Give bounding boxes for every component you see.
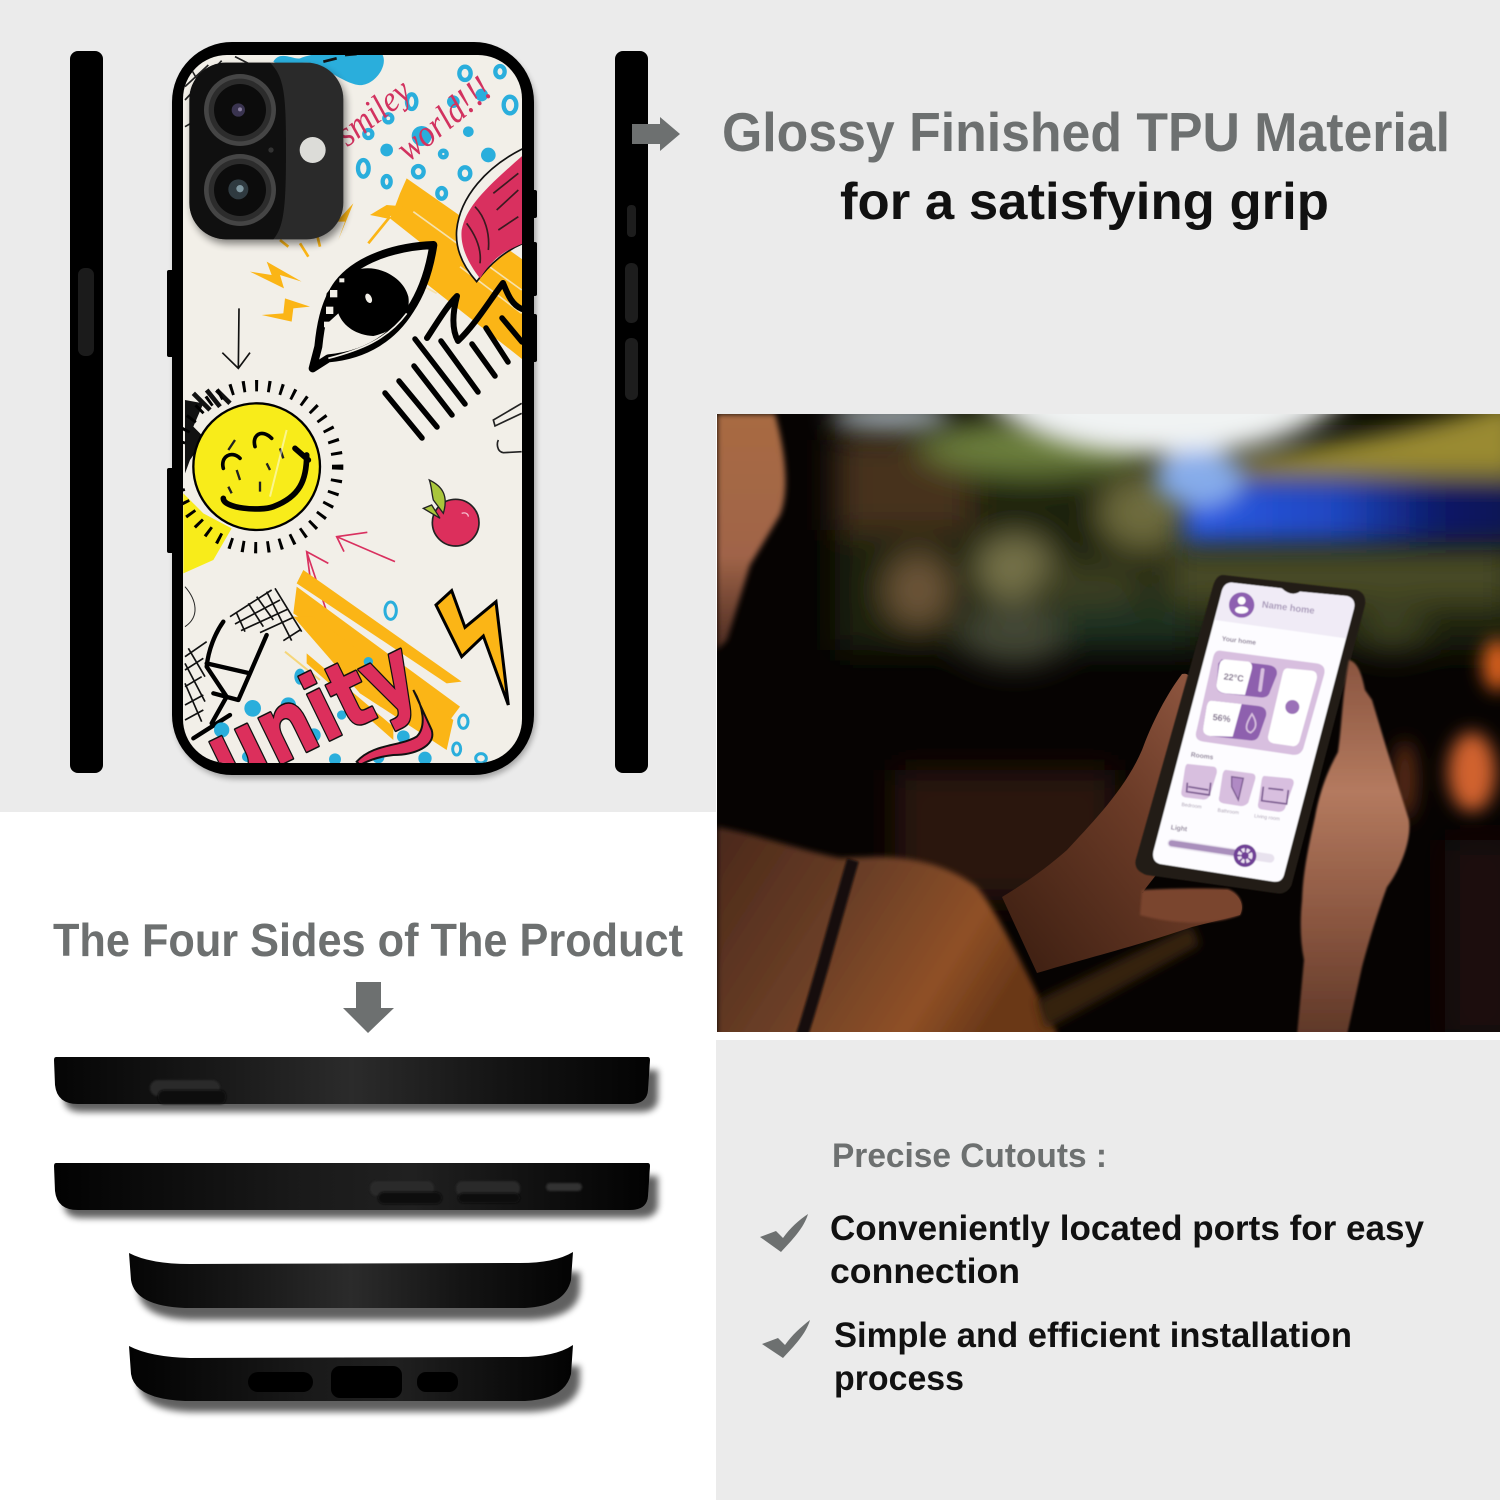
hatch stripes [385, 318, 522, 438]
photo: hands holding phone at night [717, 380, 1500, 1040]
lightning bolt [436, 591, 508, 705]
head silhouette [717, 414, 785, 650]
smartphone in zoomed coordinates: Bathroom [1217, 808, 1239, 816]
case shadow [174, 46, 536, 779]
artwork upper half [185, 51, 523, 368]
dress strap [802, 860, 853, 1035]
smartphone in zoomed coordinates: 56% [1212, 712, 1231, 724]
unity lettering: unity [189, 617, 434, 811]
heading: glossy finished: Glossy Finished TPU Material [722, 101, 1450, 163]
phone screen [1153, 583, 1354, 882]
bullet text: installation: process [834, 1359, 964, 1398]
right hand [1297, 660, 1409, 1035]
rooms label: Rooms [1190, 752, 1214, 761]
room captions: Bedroom [1181, 802, 1202, 810]
black hair strokes [185, 400, 202, 474]
right side view of case [615, 51, 648, 773]
app text: Name home [1261, 599, 1315, 616]
blurred sky and water [830, 380, 1500, 542]
heading: four sides: The Four Sides of The Product [53, 914, 683, 966]
icon: check mark two [762, 1320, 810, 1358]
camera module [189, 63, 346, 244]
artwork lower half [183, 380, 522, 763]
left hand [1002, 674, 1242, 973]
black arrow [222, 308, 250, 368]
eye doodle [313, 245, 433, 368]
smartphone in zoomed coordinates: 22°C [1223, 671, 1245, 684]
light label: Light [1170, 824, 1188, 833]
lettering tail [357, 690, 432, 765]
cherry [432, 499, 479, 546]
microphone hole [268, 147, 274, 153]
icon: check mark one [760, 1214, 808, 1252]
user avatar [1229, 592, 1254, 618]
bullet text: ports: Conveniently located ports for easy [830, 1209, 1425, 1248]
left thumb over phone [1140, 888, 1242, 922]
upper lens [204, 74, 276, 146]
artwork upper half: world!!! [389, 69, 500, 170]
pink wing [456, 148, 523, 282]
heading: satisfying grip: for a satisfying grip [840, 173, 1329, 231]
panel: top grey background [0, 0, 1500, 812]
corner hatch [185, 57, 248, 127]
smiley face [193, 403, 320, 530]
smartphone in zoomed coordinates: Living room [1254, 813, 1280, 822]
temperature tile [1216, 659, 1277, 697]
left side view of case [70, 51, 103, 773]
bullet text: ports: connection [830, 1252, 1020, 1291]
light slider [1172, 843, 1270, 858]
smartphone in zoomed coordinates [1135, 575, 1365, 894]
pink arrows [307, 532, 395, 617]
outline doodles at right and left edge [493, 403, 522, 453]
app header [1215, 583, 1354, 638]
home card [1196, 651, 1325, 755]
blurred arm behind the hand [1037, 925, 1200, 1030]
lower blue dots under strokes [385, 602, 486, 763]
case side buttons [167, 190, 537, 553]
case black frame [172, 42, 534, 775]
add tile [1268, 668, 1317, 746]
handwritten words: smiley [328, 70, 418, 154]
smartphone in zoomed coordinates: Your home [1221, 636, 1257, 647]
arrow: pointing down [343, 982, 394, 1033]
panel: bottom right grey background [716, 1040, 1500, 1500]
arrow: pointing to heading [632, 117, 680, 151]
grid hatches [185, 588, 302, 722]
printed artwork [176, 51, 523, 811]
side view: charging port strip [129, 1345, 580, 1412]
flash [300, 137, 326, 163]
thermometer icon [1260, 670, 1263, 690]
phone case back view [167, 42, 537, 811]
blue scribble [273, 55, 384, 86]
lower blue dots [214, 657, 432, 765]
room icons [1187, 783, 1288, 804]
side view: plain curved strip [129, 1252, 580, 1320]
humidity tile [1203, 701, 1266, 741]
yellow brush strokes [390, 178, 523, 360]
shoulder [717, 827, 1060, 1040]
yellow brush strokes [293, 570, 462, 750]
drop icon [1246, 714, 1256, 733]
small lightning doodles [250, 262, 302, 288]
lower lens [204, 154, 276, 226]
bullet text: installation: Simple and efficient installation [834, 1316, 1352, 1355]
side view: top edge strip [54, 1057, 658, 1112]
subheading: precise cutouts: Precise Cutouts : [832, 1137, 1107, 1175]
yellow sun blob [183, 493, 232, 573]
black zigzag [427, 283, 522, 341]
room tiles [1181, 764, 1294, 812]
marker doodle [193, 622, 267, 738]
sun rays [176, 386, 338, 548]
warm bokeh lights [1393, 639, 1500, 820]
phone body [1135, 575, 1365, 894]
side view: volume button strip [54, 1163, 658, 1218]
blurred background [835, 417, 1500, 665]
blue dots [358, 66, 516, 199]
dim midground glow [895, 770, 1500, 1040]
